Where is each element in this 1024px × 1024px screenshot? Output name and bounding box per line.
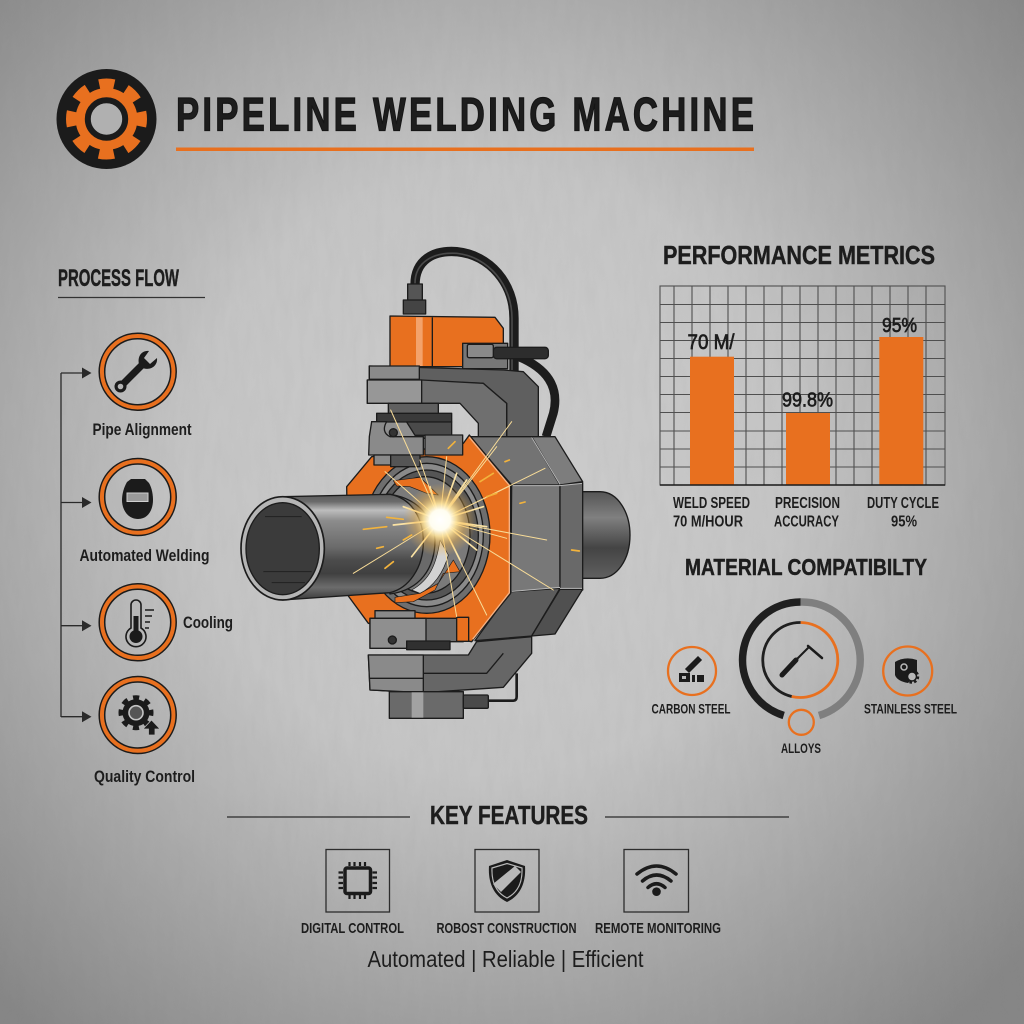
- feature: robust construction: [436, 850, 576, 937]
- inner ring gauge: [763, 622, 838, 697]
- step: quality control: [94, 676, 195, 786]
- bar: precision accuracy: [782, 390, 833, 485]
- feature: remote monitoring: [595, 850, 721, 937]
- panel: key features: [227, 800, 789, 972]
- icon: hammer and block: [679, 657, 704, 682]
- axis labels: DUTY CYCLE: [867, 495, 939, 512]
- icon: gear with arrow: [121, 698, 160, 735]
- step: cooling: [99, 584, 233, 661]
- heading: performance metrics: PERFORMANCE METRICS: [663, 240, 935, 270]
- bar: duty cycle: 95%: [882, 315, 917, 337]
- cables: [415, 251, 555, 437]
- icon: gear logo: [56, 69, 156, 169]
- icon: shield and gear: [895, 658, 918, 683]
- orange inner crescents: [393, 477, 438, 495]
- axis labels: ACCURACY: [774, 514, 839, 530]
- upper clamp: [369, 403, 463, 467]
- welding machine illustration: [241, 251, 630, 718]
- bar: weld speed: [688, 331, 735, 485]
- upper bracket: [367, 366, 538, 437]
- panel: performance metrics: [660, 240, 945, 530]
- icon: welding torch: [782, 646, 822, 675]
- axis labels: WELD SPEED: [673, 495, 750, 512]
- panel: process flow: [58, 265, 233, 786]
- chart grid: [660, 286, 945, 485]
- label: cooling: Cooling: [183, 614, 233, 632]
- label: pipe alignment: Pipe Alignment: [92, 421, 192, 439]
- label: automated welding: Automated Welding: [80, 547, 210, 565]
- axis labels: [673, 495, 939, 530]
- step: automated welding: [80, 458, 210, 565]
- axis labels: PRECISION: [775, 495, 840, 512]
- material: stainless steel: [864, 646, 957, 716]
- orange control box: [390, 316, 503, 367]
- connector: [408, 284, 422, 301]
- feature: robust construction: ROBOST CONSTRUCTION: [436, 920, 576, 937]
- feature: digital control: DIGITAL CONTROL: [301, 920, 404, 937]
- left pipe: [241, 494, 448, 600]
- axis labels: 70 M/HOUR: [673, 514, 743, 530]
- material: carbon steel: [652, 647, 731, 716]
- lower bracket: [368, 637, 532, 693]
- weld spark burst: [353, 410, 579, 617]
- heading: key features: KEY FEATURES: [430, 800, 588, 830]
- material: alloys: ALLOYS: [781, 740, 821, 756]
- lower actuator: [389, 673, 517, 718]
- heading: material compatibility: MATERIAL COMPATIBILTY: [685, 554, 927, 580]
- flow arrows: [61, 368, 92, 722]
- feature: remote monitoring: REMOTE MONITORING: [595, 920, 721, 937]
- adjustment knob: [463, 343, 548, 369]
- icon: microchip: [338, 862, 377, 899]
- bar: precision accuracy: 99.8%: [782, 390, 833, 412]
- bar: weld speed: 70 M/: [688, 331, 735, 354]
- icon: wrench: [114, 351, 157, 392]
- icon: wifi: [637, 866, 676, 896]
- outer ring gauge: [743, 602, 860, 716]
- icon: thermometer: [126, 600, 154, 647]
- inner rotating ring: [363, 457, 490, 613]
- title underline: [176, 148, 754, 151]
- step: pipe alignment: [92, 333, 192, 439]
- right pipe end: [580, 492, 630, 578]
- material: carbon steel: CARBON STEEL: [652, 700, 731, 716]
- lower clamp: [370, 611, 469, 650]
- label: quality control: Quality Control: [94, 768, 195, 786]
- material: alloys: [781, 710, 821, 756]
- heading: process flow: PROCESS FLOW: [58, 265, 179, 292]
- axis labels: 95%: [891, 514, 917, 530]
- icon: shield: [489, 860, 525, 902]
- material: stainless steel: STAINLESS STEEL: [864, 700, 957, 716]
- bar: duty cycle: [879, 315, 923, 485]
- icon: welding helmet: [122, 479, 153, 519]
- orange face plate: [347, 435, 511, 642]
- tagline: Automated | Reliable | Efficient: [368, 946, 644, 972]
- feature: digital control: [301, 850, 404, 937]
- machine body: [470, 437, 583, 641]
- title: PIPELINE WELDING MACHINE: [176, 88, 754, 141]
- panel: material compatibility: [652, 554, 957, 756]
- header: [56, 69, 754, 169]
- collar: [387, 494, 435, 594]
